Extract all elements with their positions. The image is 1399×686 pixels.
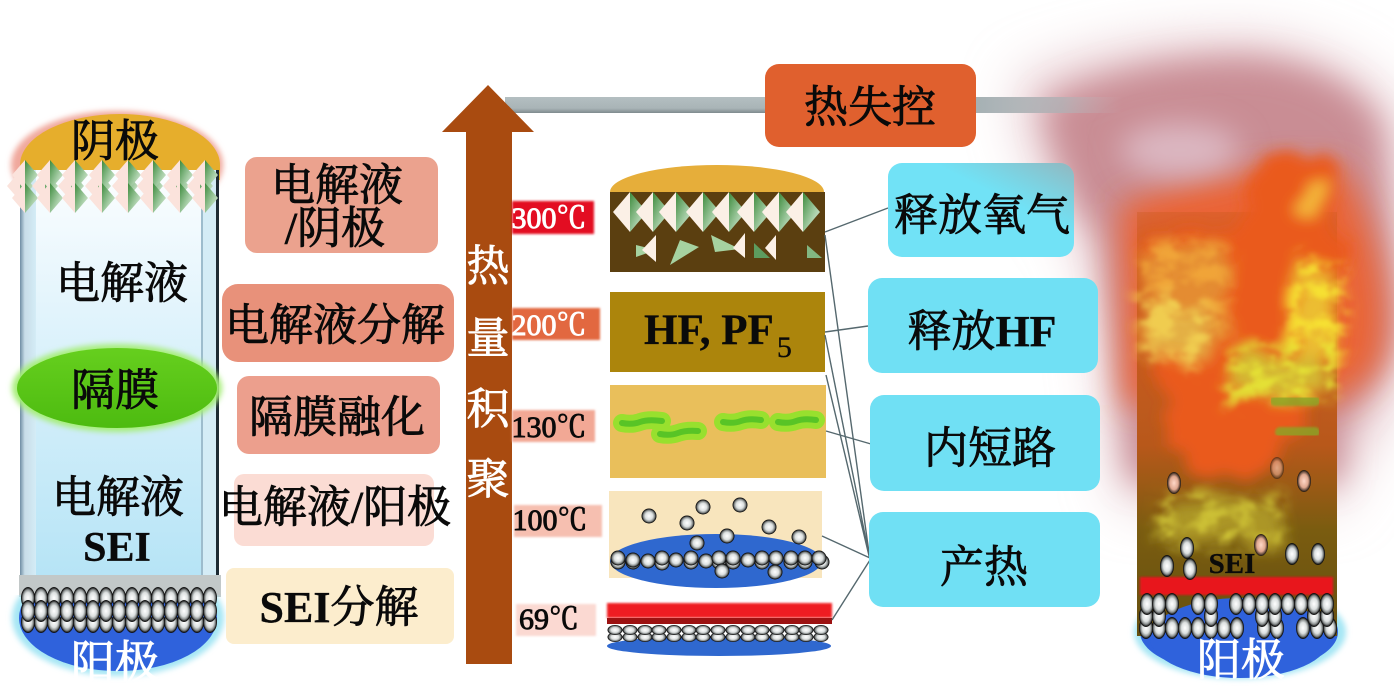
particles bbox=[608, 632, 828, 642]
stage 100: SEI breakdown bbox=[609, 491, 830, 588]
temperature 200: 200℃ bbox=[512, 309, 586, 342]
reaction box: SEI decomposition: SEI分解 bbox=[260, 583, 418, 632]
arrow label: 量 bbox=[466, 316, 510, 363]
melted separator traces bbox=[1275, 401, 1315, 432]
label: anode: 阳极 bbox=[71, 638, 159, 686]
label: electrolyte: 电解液 bbox=[56, 259, 188, 308]
anode disc bbox=[8, 595, 226, 680]
glass body bbox=[20, 170, 219, 578]
outcome: internal short bbox=[870, 395, 1100, 491]
outcome: internal short: 内短路 bbox=[924, 424, 1056, 473]
connector bar to runaway box bbox=[505, 97, 767, 113]
stage 69: SEI layer bbox=[607, 603, 832, 656]
stage 300: oxygen release bbox=[610, 165, 825, 272]
anode label: 阳极 bbox=[1197, 636, 1285, 685]
melted separator pieces bbox=[622, 419, 816, 435]
stage 200: HF PF5 bbox=[610, 292, 825, 372]
cathode crystals bbox=[7, 160, 218, 213]
stage 200: HF PF5: 5 bbox=[777, 331, 792, 364]
outcome: oxygen release: 释放氧气 bbox=[894, 191, 1070, 240]
burning cell bbox=[1134, 150, 1346, 685]
label: electrolyte SEI: 电解液 bbox=[52, 473, 184, 522]
outcome: heat generation: 产热 bbox=[940, 543, 1029, 592]
reaction box: electrolyte cathode: /阴极 bbox=[285, 204, 385, 253]
connector lines bbox=[822, 208, 888, 620]
runaway box: 热失控 bbox=[804, 83, 936, 132]
arrow label: 积 bbox=[466, 387, 510, 434]
particles bbox=[610, 498, 830, 580]
SEI label: SEI bbox=[1209, 548, 1255, 580]
anode disc bbox=[1134, 585, 1346, 679]
SEI red band bbox=[1140, 577, 1333, 595]
stage 130: separator melt bbox=[610, 385, 826, 478]
temperature 100: 100℃ bbox=[512, 504, 588, 537]
outcome: HF release bbox=[868, 278, 1098, 373]
loose particles bbox=[1160, 457, 1325, 580]
flames bbox=[1140, 150, 1345, 547]
temperature 300: 300℃ bbox=[512, 202, 586, 235]
crystals bbox=[613, 192, 822, 265]
runaway box bbox=[765, 64, 976, 147]
reaction box: SEI decomposition bbox=[226, 568, 454, 644]
temperature 130: 130℃ bbox=[512, 411, 586, 444]
reaction box: electrolyte anode bbox=[219, 474, 451, 546]
reaction box: electrolyte decomposition bbox=[222, 284, 454, 362]
connector bar into flame bbox=[972, 97, 1122, 113]
SEI band bbox=[19, 575, 221, 597]
left cell diagram bbox=[7, 111, 224, 686]
cell body bbox=[1137, 212, 1337, 636]
anode particles bbox=[1139, 593, 1337, 639]
outcome: oxygen release bbox=[888, 163, 1074, 257]
reaction box: electrolyte cathode: 电解液 bbox=[271, 161, 403, 210]
separator disc bbox=[12, 344, 222, 432]
arrow label: 聚 bbox=[466, 457, 510, 504]
smoke cloud bbox=[1020, 44, 1399, 500]
label: cathode: 阴极 bbox=[71, 117, 159, 166]
label: electrolyte SEI: SEI bbox=[83, 525, 151, 571]
reaction box: separator melting bbox=[237, 376, 440, 454]
label: electrolyte SEI bbox=[52, 473, 184, 571]
temperature 69: 69℃ bbox=[519, 603, 579, 636]
reaction box: electrolyte cathode bbox=[245, 157, 438, 253]
heat accumulation arrow bbox=[442, 85, 534, 664]
stage 200: HF PF5: HF, PF bbox=[644, 307, 774, 354]
reaction box: electrolyte anode: 电解液/阳极 bbox=[219, 483, 451, 532]
arrow label: 热 bbox=[466, 244, 510, 291]
outcome: heat generation bbox=[869, 512, 1100, 607]
reaction box: separator melting: 隔膜融化 bbox=[249, 393, 425, 442]
arrow label bbox=[466, 244, 510, 504]
outcome: HF release: 释放HF bbox=[907, 307, 1057, 356]
anode particles bbox=[21, 611, 217, 633]
reaction box: electrolyte decomposition: 电解液分解 bbox=[225, 301, 445, 350]
cathode glow and dome bbox=[11, 111, 223, 219]
label: separator: 隔膜 bbox=[71, 366, 159, 415]
